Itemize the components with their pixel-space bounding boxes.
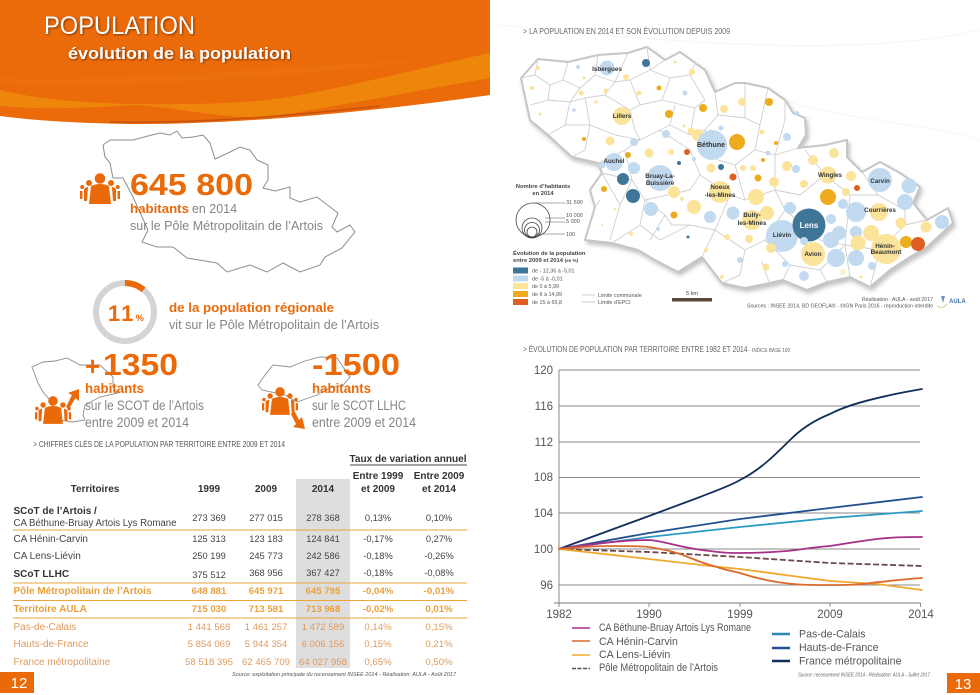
row: Hauts-de-France: Hauts-de-France (14, 639, 89, 650)
row: Territoire AULA: 713 968 (306, 604, 341, 615)
legend: chart left column: CA Béthune-Bruay Artois Lys Romane (599, 622, 751, 634)
row: SCoT de l'Artois: 0,13% (365, 513, 391, 523)
city labels: Courrières (864, 207, 896, 214)
small territory outline (258, 357, 350, 402)
panel: SCOT de l'Artois gain (32, 347, 204, 430)
legend: circle sizes: 5 000 (566, 219, 580, 225)
highlighted 2014 column (296, 479, 350, 668)
row: SCoT de l'Artois (14, 506, 452, 529)
table header: Entre 1999 (353, 471, 404, 482)
row: CA Hénin-Carvin: 124 841 (306, 534, 340, 544)
map territory (521, 47, 953, 290)
city labels: Avion (804, 251, 822, 258)
table source: Source: exploitation principale du recensement INSEE 2014 - Réalisation: AULA - Août 2017 (232, 672, 457, 678)
legend: chart right column (772, 628, 902, 668)
y axis labels: 120 (534, 365, 553, 377)
row: Pôle Métropolitain de l'Artois: 645 971 (249, 586, 284, 597)
row: Hauts-de-France: 0,15% (364, 639, 392, 650)
legend: population change: de 0 à 5,99 (532, 284, 559, 290)
row: SCoT LLHC: -0,08% (424, 568, 454, 578)
legend: population change: entre 2009 et 2014 (en %) (513, 258, 579, 264)
y axis labels: 108 (534, 472, 553, 484)
row: SCoT LLHC: 375 512 (192, 570, 226, 580)
city labels: Isbergues (592, 66, 622, 73)
gain caption: sur le SCOT de l’Artois (85, 398, 204, 413)
small territory outline (32, 358, 118, 422)
row: SCoT de l'Artois: 278 368 (306, 513, 340, 523)
panel: regional share (96, 283, 379, 341)
table header (71, 454, 467, 495)
share caption: vit sur le Pôle Métropolitain de l’Artois (169, 317, 379, 332)
loss caption: habitants (312, 381, 371, 396)
row: SCoT LLHC: -0,18% (363, 568, 393, 578)
scale bar (672, 291, 712, 302)
row: Hauts-de-France: 6 006 156 (302, 639, 344, 650)
row: Hauts-de-France (14, 639, 453, 650)
row: SCoT LLHC (14, 568, 454, 580)
table header: et 2009 (361, 484, 395, 495)
y axis labels: 104 (534, 508, 554, 520)
legend: circle sizes: en 2014 (532, 191, 554, 197)
heading: map: > LA POPULATION EN 2014 ET SON ÉVOLUTION DEPUIS 2009 (523, 27, 730, 36)
row: Territoire AULA: 715 030 (192, 604, 226, 615)
row separators (13, 530, 467, 618)
panel: total population (80, 131, 355, 272)
y axis labels: 116 (535, 401, 553, 413)
legend: chart left column (572, 622, 751, 674)
gain caption: entre 2009 et 2014 (85, 415, 189, 430)
loss caption (312, 381, 416, 430)
row: CA Hénin-Carvin: 125 313 (192, 534, 226, 544)
table header: 2009 (255, 484, 278, 495)
row: SCoT LLHC: 367 427 (306, 568, 340, 578)
row: France métropolitaine: 62 465 709 (242, 657, 290, 668)
legend: population change: de - 12,36 à -5,01 (532, 268, 575, 274)
row: SCoT de l'Artois: 277 015 (249, 513, 283, 523)
title: POPULATION (44, 12, 195, 40)
gain number: + (85, 351, 100, 381)
row: Territoire AULA: 713 581 (249, 604, 284, 615)
city labels: Lillers (613, 113, 632, 120)
territory outline (103, 131, 355, 272)
row: Hauts-de-France: 0,21% (425, 639, 453, 650)
legend: circle sizes (516, 184, 583, 238)
chart grid and axes (554, 370, 920, 607)
panel: key figures table (13, 454, 467, 668)
row: Pas-de-Calais: 0,14% (364, 622, 392, 633)
legend: chart right column: Pas-de-Calais (799, 628, 866, 640)
legend: boundaries: Limite communale (598, 293, 642, 299)
gain caption: habitants (85, 381, 144, 396)
legend: circle sizes: 10 000 (566, 213, 583, 219)
table header: 1999 (198, 484, 221, 495)
city labels: Bruay-La- (645, 173, 675, 180)
row: Hauts-de-France: 5 944 354 (245, 639, 288, 650)
y axis labels (534, 365, 554, 592)
loss caption: entre 2009 et 2014 (312, 415, 416, 430)
population caption: habitants (130, 201, 189, 216)
row: Pôle Métropolitain de l'Artois: 645 795 (306, 586, 341, 597)
donut value: 11% (108, 301, 145, 326)
population caption (130, 201, 323, 233)
city labels: Buissière (646, 180, 675, 187)
page number 12 (0, 672, 34, 693)
line: Hauts-de-France (559, 497, 922, 549)
chart source: Source: recensement INSEE 2014 - Réalisation: AULA - Juillet 2017 (798, 672, 930, 678)
table header: Territoires (71, 484, 120, 495)
row: SCoT de l'Artois: 273 369 (192, 513, 226, 523)
line: CA Lens-Liévin (559, 549, 922, 590)
city labels: -les-Mines (705, 192, 736, 199)
row: Pôle Métropolitain de l'Artois: Pôle Métropolitain de l’Artois (14, 586, 152, 597)
legend: population change: de 15 à 65,8 (532, 300, 562, 306)
y axis labels: 112 (535, 437, 553, 449)
row: Territoire AULA: Territoire AULA (14, 604, 87, 615)
city labels: Béthune (697, 142, 725, 149)
icon: people (262, 387, 298, 415)
x axis labels: 2014 (908, 609, 934, 621)
row: Pôle Métropolitain de l'Artois: -0,04% (363, 586, 394, 597)
population caption: en 2014 (192, 201, 237, 216)
legend: circle sizes: 31 590 (566, 200, 583, 206)
legend: circle sizes: 100 (566, 232, 575, 238)
legend: population change: de -5 à -0,01 (532, 276, 563, 282)
row: CA Hénin-Carvin: CA Hénin-Carvin (14, 534, 88, 545)
row: Pas-de-Calais: 1 461 257 (245, 622, 287, 633)
row: Pôle Métropolitain de l'Artois: 648 881 (192, 586, 227, 597)
heading: line chart: > ÉVOLUTION DE POPULATION PAR TERRITOIRE ENTRE 1982 ET 2014 - INDICE BASE 100 (523, 345, 790, 354)
row: Pas-de-Calais: 1 441 568 (188, 622, 230, 633)
row: Pas-de-Calais: 0,15% (425, 622, 453, 633)
row: CA Lens-Liévin: 245 773 (249, 551, 283, 561)
city labels: Bully- (743, 212, 761, 219)
map credits (747, 297, 933, 310)
legend: chart right column: France métropolitaine (799, 656, 902, 668)
legend: population change: Évolution de la population (513, 249, 586, 257)
x axis labels (546, 609, 934, 621)
row: SCoT LLHC: 368 956 (249, 568, 283, 578)
row: France métropolitaine: 64 027 958 (299, 657, 347, 668)
x axis labels: 2009 (817, 609, 843, 621)
city labels (592, 66, 902, 258)
row: CA Lens-Liévin: CA Lens-Liévin (14, 551, 81, 562)
row: CA Hénin-Carvin: 0,27% (426, 534, 452, 544)
line: CA Hénin-Carvin (559, 546, 922, 585)
big number: 645 800 (130, 167, 253, 202)
subtitle: évolution de la population (68, 44, 291, 63)
row: Pas-de-Calais: Pas-de-Calais (14, 622, 76, 633)
panel: line chart (534, 365, 934, 621)
scale bar: 5 km (686, 291, 698, 297)
row: CA Lens-Liévin (14, 551, 454, 562)
y axis labels: 96 (540, 580, 553, 592)
panel: SCOT LLHC loss (258, 347, 416, 430)
y axis labels: 100 (534, 544, 553, 556)
row: Hauts-de-France: 5 854 069 (188, 639, 230, 650)
row: SCoT de l'Artois: CA Béthune-Bruay Artois Lys Romane (14, 518, 177, 529)
row: CA Hénin-Carvin (14, 534, 452, 545)
x axis labels: 1982 (546, 609, 572, 621)
legend: boundaries: Limite d’EPCI (598, 300, 631, 306)
row: Territoire AULA (14, 604, 453, 615)
line: France métropolitaine (559, 389, 922, 549)
map credits: Réalisation : AULA - août 2017 (862, 297, 933, 303)
line: CA Béthune-Bruay (559, 537, 922, 553)
row: CA Hénin-Carvin: 123 183 (249, 534, 283, 544)
legend: boundaries (582, 293, 642, 306)
panel: population map (521, 47, 953, 290)
row: Pas-de-Calais: 1 472 589 (302, 622, 344, 633)
row: CA Lens-Liévin: 242 586 (306, 551, 340, 561)
city labels: Carvin (870, 178, 890, 185)
row: CA Lens-Liévin: -0,18% (363, 551, 393, 561)
population caption: sur le Pôle Métropolitain de l’Artois (130, 218, 323, 233)
x axis labels: 1999 (727, 609, 753, 621)
page number 12: 12 (11, 675, 27, 692)
row: SCoT de l'Artois: 0,10% (426, 513, 452, 523)
row: CA Lens-Liévin: -0,26% (424, 551, 454, 561)
city labels: Wingles (818, 172, 843, 179)
row: France métropolitaine: 0,50% (425, 657, 453, 668)
icon: AULA logo: AULA (949, 299, 966, 305)
population circles (530, 59, 949, 281)
city labels: Lens (800, 221, 819, 230)
icon: people (80, 173, 120, 204)
loss value: -1500 (312, 347, 400, 382)
row: CA Lens-Liévin: 250 199 (192, 551, 226, 561)
icon: down arrow (291, 410, 305, 429)
share caption (169, 300, 379, 332)
table header: 2014 (312, 484, 335, 495)
table header: Entre 2009 (414, 471, 465, 482)
table header: et 2014 (422, 484, 456, 495)
row: Pas-de-Calais (14, 622, 453, 633)
icon: people (35, 396, 71, 424)
page number 13: 13 (955, 676, 971, 693)
legend: population change: de 6 à 14,99 (532, 292, 562, 298)
donut chart 11% (96, 283, 154, 341)
legend: chart right column: Hauts-de-France (799, 642, 879, 654)
legend: circle sizes: Nombre d’habitants (516, 184, 570, 190)
loss caption: sur le SCOT LLHC (312, 398, 406, 413)
row: France métropolitaine (14, 657, 453, 668)
row: SCoT de l'Artois: SCoT de l’Artois / (14, 506, 97, 517)
row: Territoire AULA: -0,02% (363, 604, 394, 615)
city labels: Noeux (710, 184, 730, 191)
map credits: Sources : INSEE 2014, BD GEOFLA® - ©IGN Paris 2016 - reproduction interdite (747, 302, 933, 310)
row: France métropolitaine: France métropolitaine (14, 657, 111, 668)
share caption: de la population régionale (169, 300, 334, 315)
row: Pôle Métropolitain de l'Artois (14, 586, 455, 597)
heading: key figures table: > CHIFFRES CLÉS DE LA POPULATION PAR TERRITOIRE ENTRE 2009 ET 2014 (33, 440, 285, 449)
row: SCoT LLHC: SCoT LLHC (14, 569, 69, 580)
legend: chart left column: CA Hénin-Carvin (599, 636, 678, 648)
city labels: Beaumont (871, 249, 902, 256)
line: Pas-de-Calais (559, 511, 922, 549)
panel: orange header banner (0, 0, 490, 124)
legend: chart left column: Pôle Métropolitain de l’Artois (599, 662, 718, 674)
line: Pôle Métropolitain (dashed) (559, 549, 922, 566)
icon: up arrow (66, 389, 79, 409)
gain caption (85, 381, 204, 430)
row: CA Hénin-Carvin: -0,17% (363, 534, 393, 544)
gain value: 1350 (103, 347, 178, 382)
icon: AULA logo (937, 296, 966, 308)
legend: population change (513, 249, 586, 306)
legend: chart left column: CA Lens-Liévin (599, 649, 670, 661)
row: Territoire AULA: 0,01% (425, 604, 453, 615)
row: France métropolitaine: 58 518 395 (185, 657, 233, 668)
page number 13 (947, 673, 980, 693)
x axis labels: 1990 (636, 609, 662, 621)
city labels: Hénin- (875, 243, 895, 250)
city labels: les-Mines (738, 220, 767, 227)
row: Pôle Métropolitain de l'Artois: -0,01% (424, 586, 455, 597)
commune boundaries (521, 47, 927, 287)
city labels: Liévin (773, 232, 791, 239)
table header: Taux de variation annuel (350, 454, 467, 465)
city labels: Auchel (604, 158, 625, 165)
row: France métropolitaine: 0,65% (364, 657, 392, 668)
